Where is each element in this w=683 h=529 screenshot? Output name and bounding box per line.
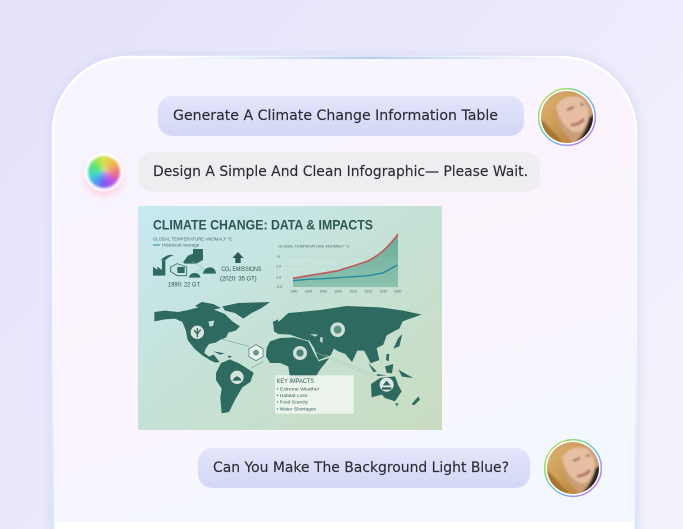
AI orb glow [84,152,124,196]
area line chart: 1995 [305,290,312,294]
anomaly legend: Historical Average [162,243,200,248]
anomaly legend: GLOBAL TEMPERATURE ANOMALY °C [153,236,233,241]
label: 1990 emissions: 1990: 22 GT [168,283,200,289]
generated infographic image [138,206,442,430]
hex icon: Australia [380,378,394,392]
label: CO2 emissions: CO₂ EMISSIONS [221,267,261,273]
AI message [138,152,540,192]
area line chart: +2 [276,255,280,259]
icon: up arrow [232,252,244,263]
anomaly legend [153,236,233,248]
key impacts box: • Food Scarcity [277,399,308,405]
icon: AI gradient orb [88,156,120,188]
key impacts box: • Habitat Loss [277,393,308,399]
icons: factory and vehicles [153,249,216,278]
avatar: user top [538,88,596,146]
key impacts box: • Water Shortages [277,406,316,412]
area line chart: 2030 [394,290,402,294]
area line chart: 2005 [335,290,342,294]
area line chart: GLOBAL TEMPERATURE ANOMALY °C [278,243,350,248]
area line chart: 1990 [290,290,298,294]
avatar: user bottom [544,439,602,497]
world map: Afro-Eurasia and Oceania [266,306,422,414]
hex icon: North America [191,326,204,339]
area line chart: 0.5 [276,265,281,269]
hex icon: Atlantic [249,345,263,361]
area line chart: 2015 [365,290,372,294]
Hudson Bay [208,321,214,327]
area line chart: 2000 [320,290,327,294]
area line chart: 2010 [350,290,357,294]
key impacts box: KEY IMPACTS [277,379,314,385]
hex icon: Asia [330,322,345,337]
label: CO2 emissions: (2020: 35 GT) [220,277,257,283]
hex icon: South America [230,371,244,384]
key impacts box: • Extreme Weather [277,387,320,393]
connector lines [220,339,264,368]
area line chart: 0.0 [276,275,281,279]
user message 2: Can You Make The Background Light Blue? [213,460,509,476]
Caspian and Black seas [310,334,323,343]
key impacts box [275,375,354,414]
AI message: Design A Simple And Clean Infographic— Please Wait. [153,164,528,180]
user message 2 [198,448,530,488]
area line chart: -0.5 [276,285,282,289]
user message 1 [158,96,524,136]
infographic title: CLIMATE CHANGE: DATA & IMPACTS [153,216,373,232]
user message 1: Generate A Climate Change Information Table [173,108,498,124]
area line chart [276,234,402,294]
label: CO2 emissions [220,267,261,283]
connector lines [313,351,380,380]
chat panel [53,56,636,529]
area line chart: 2020 [380,290,387,294]
world map: Americas [154,302,270,413]
hex icon: Africa [293,346,307,360]
